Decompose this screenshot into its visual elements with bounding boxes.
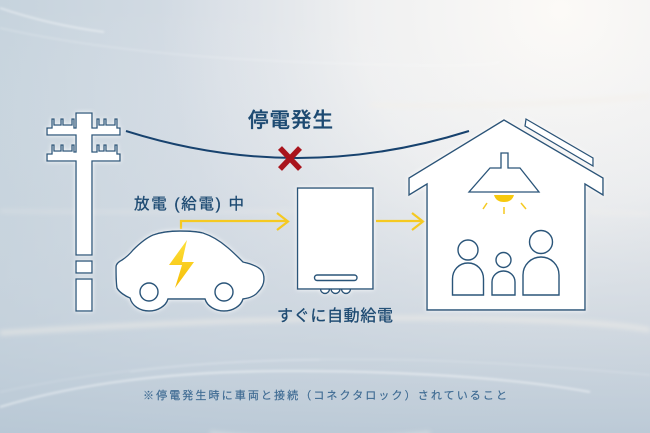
icon: electric car <box>116 231 264 311</box>
arrow: car to unit <box>181 213 288 230</box>
heading: power outage: 停電発生 <box>248 109 333 132</box>
icon: V2H power unit <box>298 188 373 294</box>
label: immediate supply: すぐに自動給電 <box>277 307 393 325</box>
icon: broken line cross <box>280 148 300 169</box>
power line <box>126 131 469 158</box>
icon: lightning bolt <box>169 240 194 288</box>
footnote: ※停電発生時に車両と接続（コネクタロック）されていること <box>143 388 507 402</box>
icon: family <box>452 230 559 295</box>
icon: ceiling lamp <box>469 153 539 214</box>
solar panel <box>525 119 593 166</box>
icon: utility pole <box>47 113 120 311</box>
arrow: unit to house <box>376 213 423 230</box>
icon: house <box>409 119 603 310</box>
label: discharging: 放電 (給電) 中 <box>134 195 244 213</box>
